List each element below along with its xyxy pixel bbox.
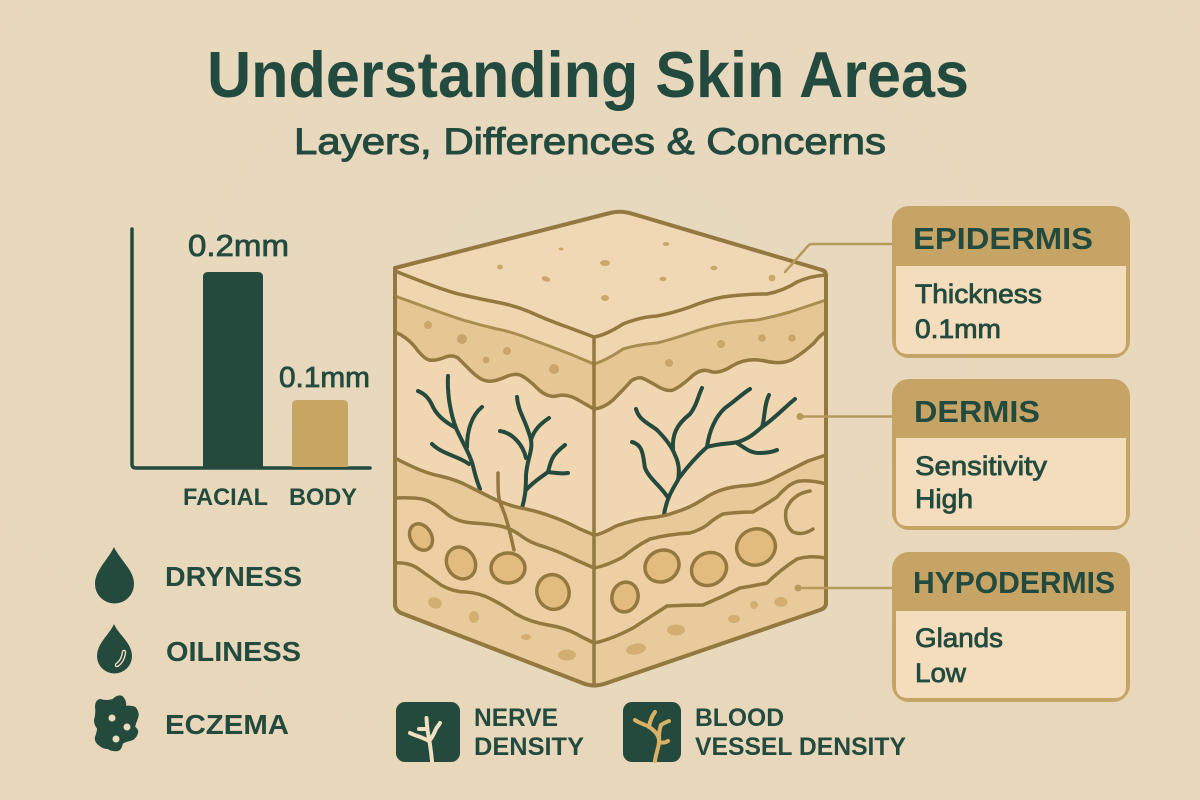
dermis lower band [395,455,826,686]
hypodermis layer [395,481,826,686]
text: sensitivity: Sensitivity [915,451,1048,481]
arrow: epidermis leader [785,244,892,272]
icon: oiliness drop [97,624,132,674]
icon: blood vessel density [623,702,681,762]
icon: nerve density [396,702,460,762]
panel: hypodermis [892,552,1130,702]
skin cross-section cube [395,212,826,686]
title: Understanding Skin Areas [207,38,969,111]
text: glands: Glands [915,623,1003,653]
nerve branches: right [632,388,795,515]
nerve branches: left [418,376,568,508]
speckles in epidermis [424,321,796,374]
epidermis inner band [395,296,826,686]
label: body: BODY [289,484,357,511]
arrow: dermis leader [796,413,892,420]
value: facial: 0.2mm [188,228,289,263]
fat cells [405,520,780,615]
text: sensitivity value: High [915,484,973,514]
panel: epidermis [892,206,1130,358]
label: blood vessel density: VESSEL DENSITY [695,733,906,761]
arrow: hypodermis leader [794,584,892,592]
surface of cube [395,212,826,685]
label: eczema: ECZEMA [165,709,289,740]
text: thickness: Thickness [915,279,1042,309]
value: body: 0.1mm [279,362,370,394]
text: glands value: Low [915,658,967,688]
panel: dermis [892,379,1130,530]
epidermis outer band [395,271,826,686]
bar: facial [203,272,263,468]
label: nerve density: NERVE [474,704,558,732]
label: dryness: DRYNESS [165,561,302,592]
label: oiliness: OILINESS [166,636,301,667]
cube outline [395,212,826,685]
label: facial: FACIAL [183,484,268,511]
bar chart: thickness [132,228,370,511]
icon: dryness drop [95,547,134,604]
bar: body [292,400,348,467]
subtitle: Layers, Differences & Concerns [294,121,886,162]
text: thickness value: 0.1mm [915,314,1001,344]
heading: hypodermis: HYPODERMIS [913,565,1115,600]
vertical nerve strand [498,473,514,550]
lower hypodermis band [395,557,826,686]
dermis layer [395,332,826,686]
C-shaped follicle [786,491,813,533]
label: nerve density: DENSITY [474,733,584,761]
heading: epidermis: EPIDERMIS [913,221,1093,256]
label: blood vessel density: BLOOD [695,704,784,732]
heading: dermis: DERMIS [914,394,1040,429]
icon: eczema patch [95,696,138,750]
speckles on surface [497,242,776,301]
front edge [592,337,596,686]
label: nerve density [474,704,584,761]
speckles in lower band [427,595,788,660]
label: blood vessel density [695,704,906,761]
